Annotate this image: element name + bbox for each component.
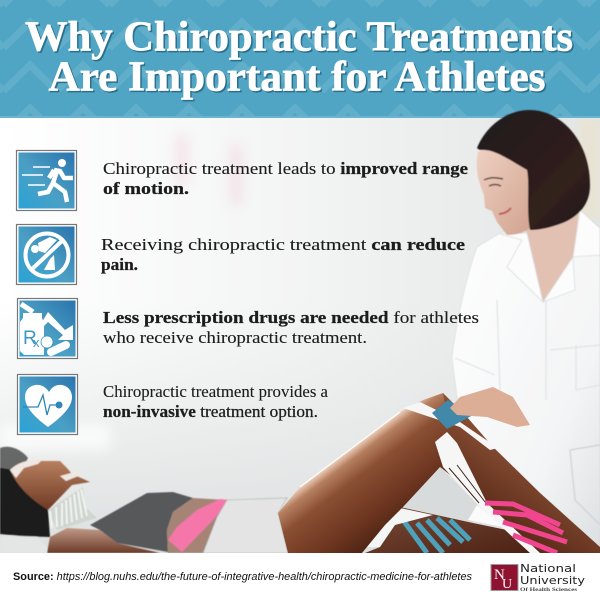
shorts [203, 498, 288, 553]
thigh [278, 393, 450, 553]
knee tape [403, 402, 498, 450]
logo: National University: N [494, 567, 505, 583]
text: non-invasive: non-invasive treatment option. [103, 402, 318, 421]
footer band [0, 553, 600, 600]
title: Why Chiropractic Treatments [26, 16, 574, 62]
logo: National University: University [520, 574, 586, 587]
text: non-invasive: Chiropractic treatment provides a [103, 382, 329, 401]
face highlight [10, 460, 81, 481]
logo: National University: U [502, 577, 512, 592]
blue patch [432, 400, 473, 429]
text: fewer drugs [103, 308, 479, 347]
text: fewer drugs: Less prescription drugs are needed for athletes [103, 308, 479, 327]
pink hip tape [168, 499, 230, 552]
text: reduce pain: Receiving chiropractic treatment can reduce [101, 235, 465, 254]
sports top [90, 492, 193, 552]
icon: heart with pulse [18, 374, 78, 434]
title: Why Chiropractic Treatments [25, 14, 573, 60]
pink strips [485, 503, 567, 553]
lower leg [365, 467, 540, 553]
coat [452, 210, 600, 547]
white tape [365, 508, 433, 547]
pillow [0, 533, 47, 553]
sheet gap [400, 467, 478, 523]
title: Are Important for Athletes [50, 56, 547, 102]
abdomen [167, 498, 227, 553]
photo background [0, 117, 600, 553]
icon: prescription drugs [18, 298, 78, 358]
pocket [570, 445, 600, 525]
title: Are Important for Athletes [48, 54, 546, 100]
hair top fluff [0, 447, 28, 482]
kinesiology tape [403, 400, 567, 553]
collar [500, 210, 600, 302]
doctor's hand [450, 387, 530, 427]
icon: no pain [16, 224, 76, 284]
neck tape stripes [50, 489, 87, 528]
text: reduce pain: pain. [101, 255, 138, 274]
tape gaps [449, 465, 485, 503]
coat folds [455, 300, 600, 400]
neck and chest [520, 212, 579, 302]
face [477, 140, 540, 235]
icon: prescription drugs: x [33, 335, 40, 350]
title [25, 14, 574, 102]
face [10, 460, 90, 510]
icon: runner [16, 150, 76, 210]
icon: prescription drugs: R [23, 328, 37, 349]
eye and brow [484, 178, 503, 186]
text: reduce pain [101, 235, 465, 274]
arm [47, 528, 160, 553]
hair [477, 110, 590, 230]
text: range of motion: Chiropractic treatment leads to improved range [103, 159, 468, 178]
text: range of motion [103, 159, 468, 198]
text: fewer drugs: who receive chiropractic treatment. [103, 328, 367, 347]
logo: National University: National [520, 562, 576, 575]
logo: National University: Of Health Sciences [520, 587, 577, 593]
logo: National University [491, 562, 586, 593]
long white tape [435, 432, 540, 553]
hair [0, 468, 50, 537]
doctor in white coat [452, 110, 600, 547]
source line: Source: https://blog.nuhs.edu/the-future-of-integrative-health/chiropractic-medicine-for-athletes [13, 571, 472, 583]
athlete lying down [0, 447, 288, 553]
blue strips [403, 518, 470, 553]
shin [440, 393, 600, 553]
neck tape [48, 487, 97, 530]
text: range of motion: of motion. [103, 179, 189, 198]
smile [499, 208, 511, 214]
text: non-invasive [103, 382, 329, 421]
header banner [0, 0, 600, 118]
white edge [300, 412, 400, 487]
